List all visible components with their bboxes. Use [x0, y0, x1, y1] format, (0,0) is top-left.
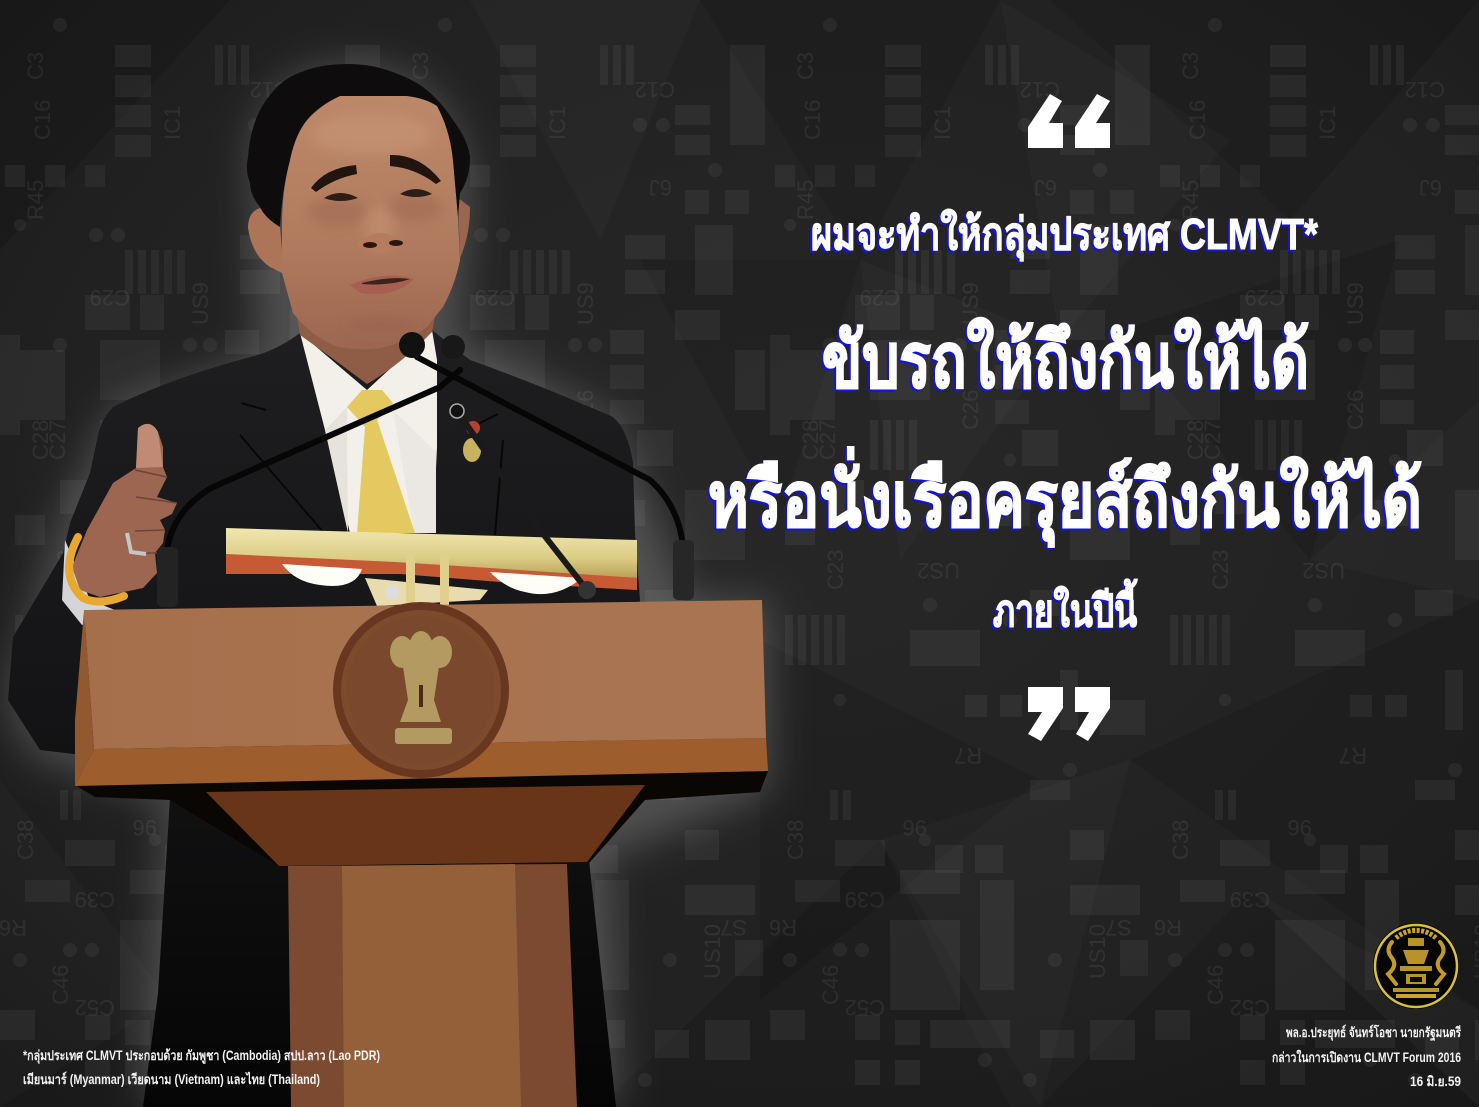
national emblem	[390, 631, 452, 744]
footnote	[23, 1048, 380, 1087]
podium lower band	[75, 738, 768, 786]
left ear	[248, 208, 284, 274]
right ear	[458, 198, 470, 258]
mouth	[350, 276, 414, 294]
shirt	[300, 330, 437, 533]
speaker attribution: 16 มิ.ย.59	[1410, 1074, 1461, 1089]
podium	[75, 600, 768, 1107]
gold reading lamp	[226, 528, 637, 606]
government seal	[1373, 923, 1459, 1009]
quote line 4: ภายในปีนี้	[993, 578, 1138, 636]
shadow under podium	[75, 771, 768, 866]
raised hand	[72, 424, 177, 597]
ring	[127, 533, 146, 554]
closing quotation mark	[1028, 687, 1110, 741]
necktie	[347, 390, 415, 533]
lapel pins	[463, 421, 481, 462]
nose	[356, 233, 404, 251]
speaker figure	[8, 64, 640, 1107]
podium front panel	[84, 600, 766, 749]
lapel lines	[240, 403, 503, 540]
gold bracelet	[69, 537, 124, 602]
speaker attribution	[1272, 1023, 1462, 1089]
suit jacket	[8, 330, 640, 1107]
eyes	[324, 189, 432, 201]
quote line 1: ผมจะทำให้กลุ่มประเทศ CLMVT*	[811, 208, 1319, 262]
face shading	[308, 194, 443, 333]
podium stem and column	[288, 864, 577, 1107]
neck	[293, 290, 440, 384]
footnote: *กลุ่มประเทศ CLMVT ประกอบด้วย กัมพูชา (Cambodia) สปป.ลาว (Lao PDR)	[23, 1048, 380, 1064]
shirt cuff	[62, 540, 115, 625]
podium left edge	[75, 610, 94, 786]
eyebrows	[311, 155, 441, 192]
opening quotation mark	[1028, 94, 1110, 148]
forehead highlight	[312, 115, 432, 250]
microphone heads	[157, 332, 694, 607]
wooden medallion	[333, 602, 509, 778]
hair	[247, 64, 470, 227]
quote line 2 highlighted: ขับรถให้ถึงกันให้ได้	[822, 317, 1309, 404]
microphones	[157, 332, 694, 607]
glow behind speaker	[5, 66, 770, 1107]
footnote: เมียนมาร์ (Myanmar) เวียดนาม (Vietnam) และไทย (Thailand)	[23, 1071, 320, 1087]
face	[282, 96, 460, 349]
